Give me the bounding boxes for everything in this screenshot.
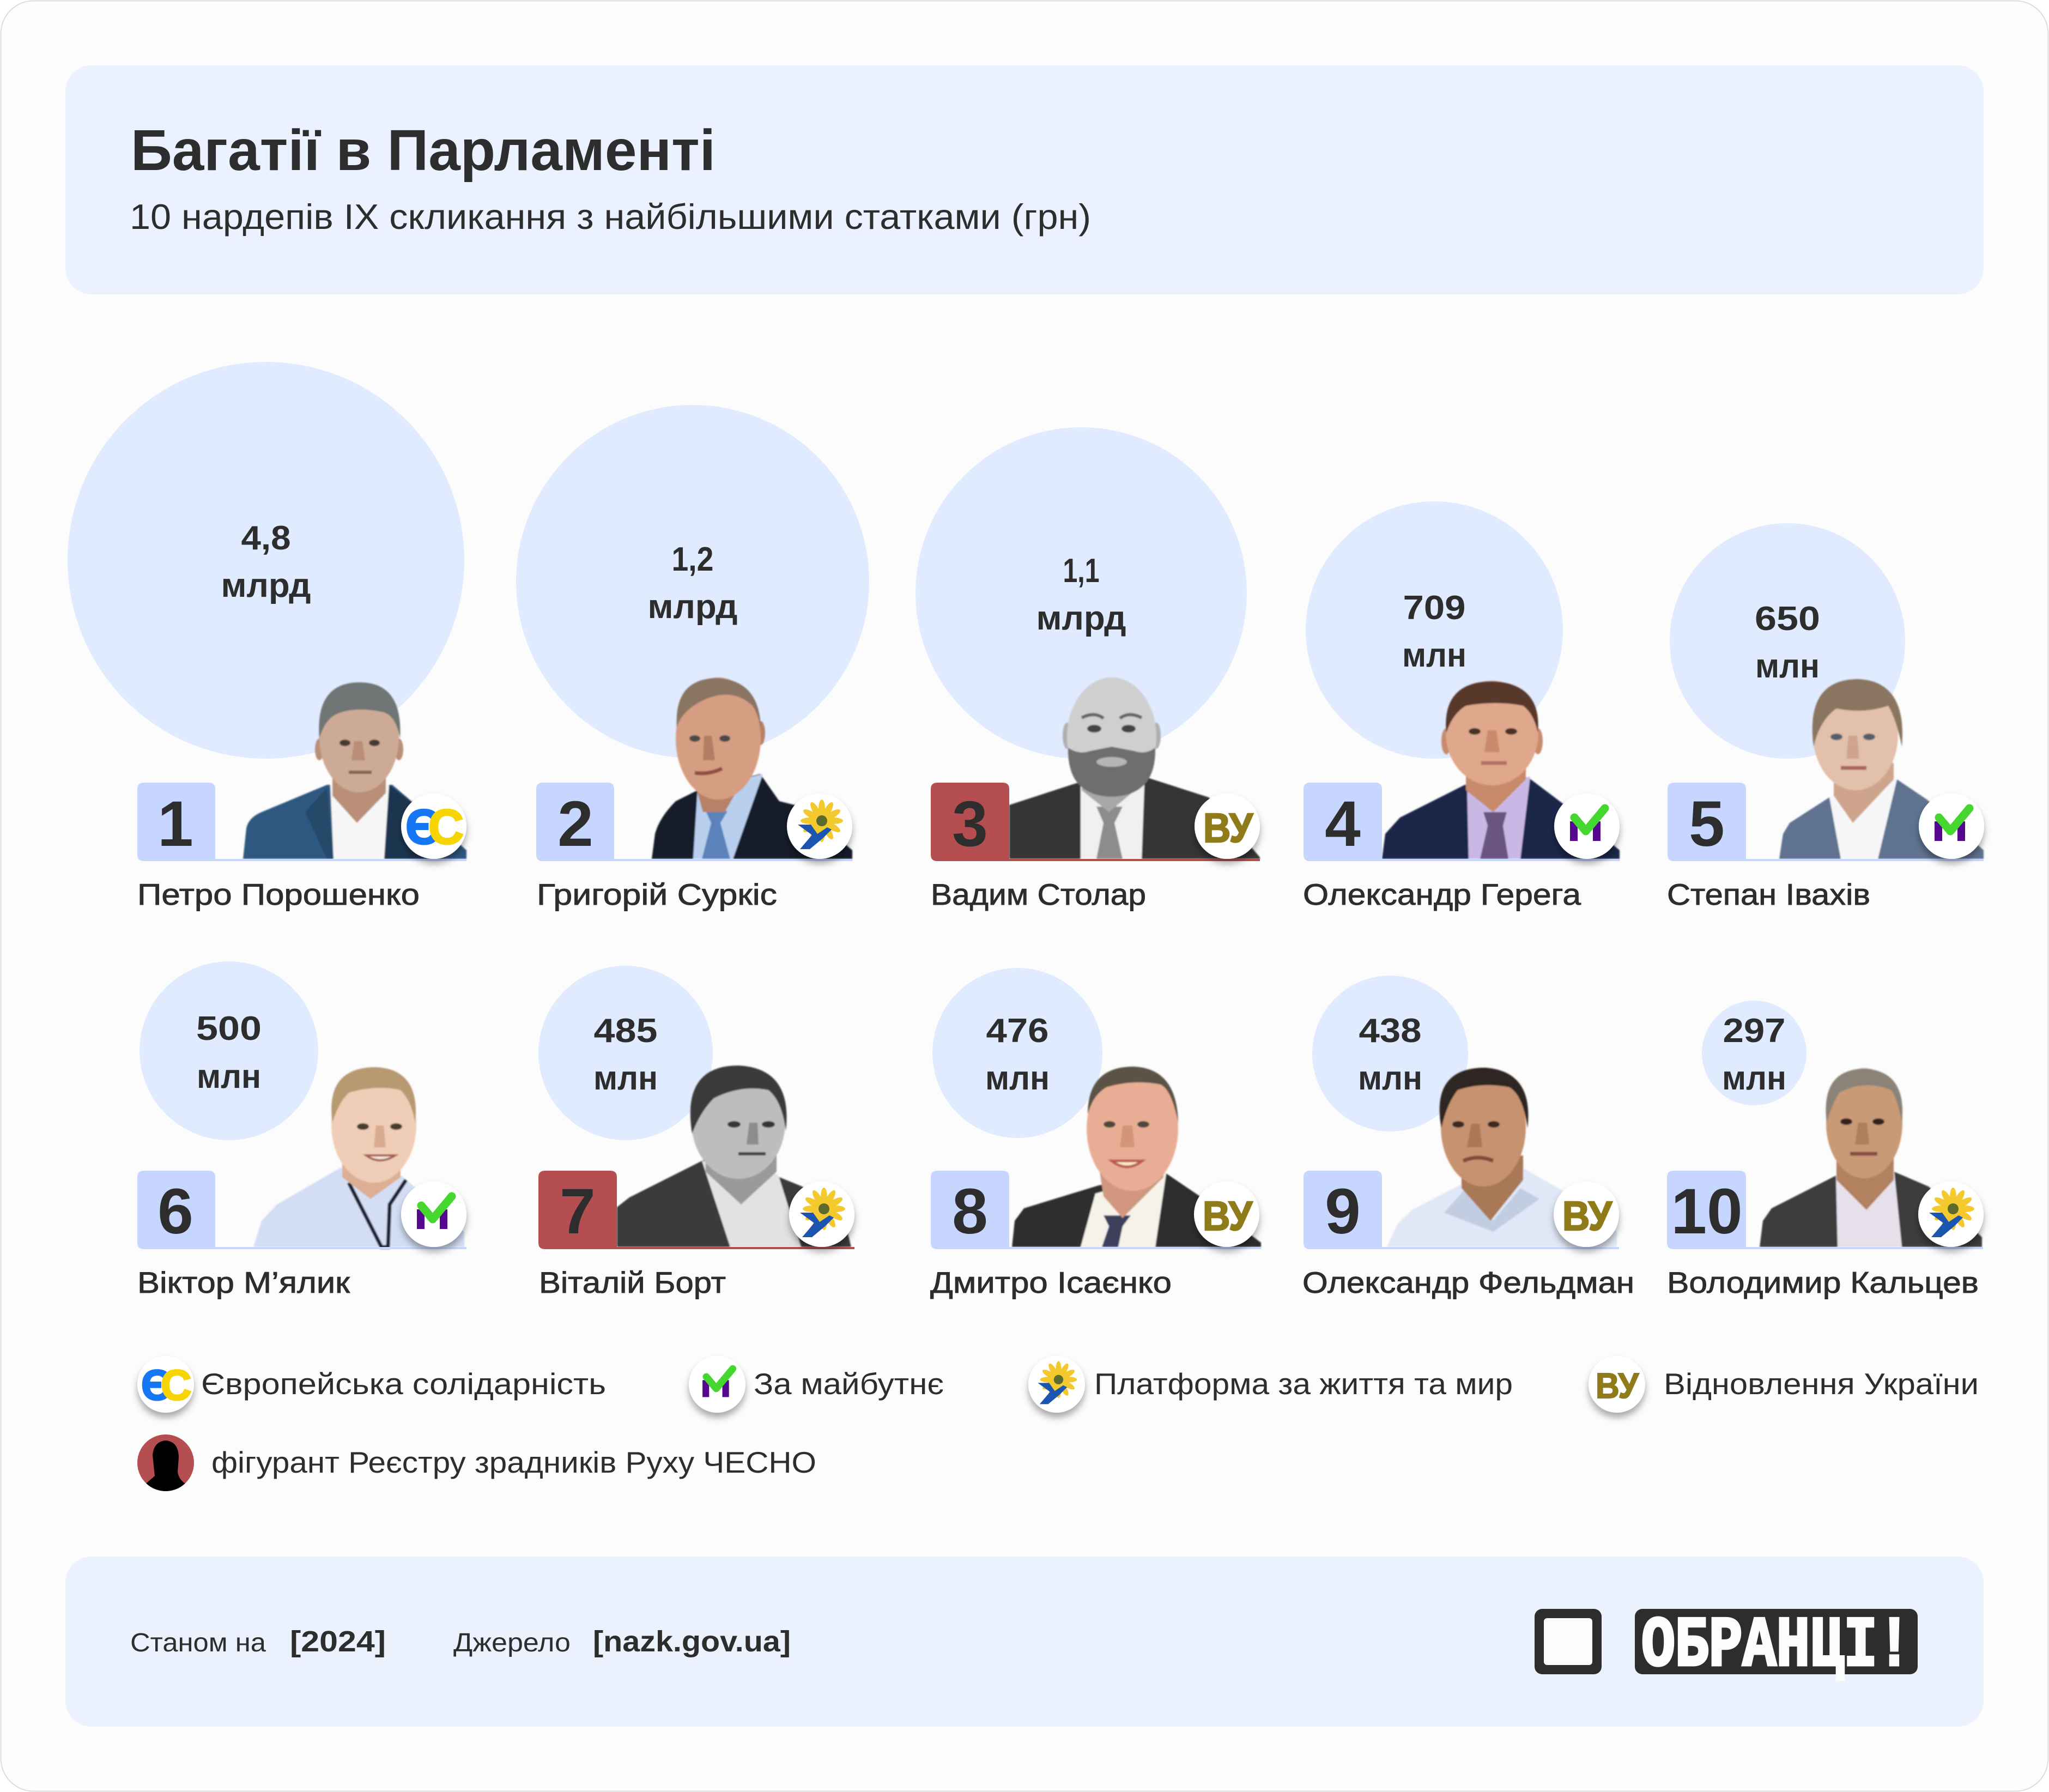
portrait	[617, 1065, 851, 1247]
rank box	[931, 783, 1260, 861]
card: rank 7 Віталій Борт	[538, 966, 854, 1299]
source label: [nazk.gov.ua]	[593, 1625, 791, 1658]
portrait	[1779, 679, 1984, 859]
bubble: 500 млн: млн	[197, 1058, 261, 1095]
bubble: 4,8 млрд	[68, 362, 464, 759]
legend item: Європейська солідарність	[137, 1356, 606, 1413]
bubble: 500 млн	[140, 961, 318, 1140]
bubble: 650 млн	[1670, 523, 1905, 759]
rank box	[1667, 1171, 1983, 1249]
card: rank 6 Віктор М’ялик	[137, 961, 466, 1299]
bubble: 485 млн: 485	[594, 1012, 657, 1050]
portrait	[1760, 1068, 1982, 1247]
legend item: Відновлення України: ВУ	[1596, 1366, 1639, 1406]
bubble: 709 млн	[1306, 501, 1563, 759]
source label	[453, 1625, 791, 1658]
bubble: 485 млн	[538, 966, 713, 1140]
bubble: 650 млн: млн	[1755, 647, 1820, 685]
rank box	[137, 783, 466, 861]
bubble: 438 млн: 438	[1359, 1012, 1421, 1050]
date label	[130, 1625, 386, 1658]
party badge: ВУ: ВУ	[1203, 1193, 1253, 1239]
panel: footer	[65, 1557, 1984, 1727]
party badge: ВУ: ВУ	[1562, 1193, 1612, 1239]
bubble: 1,2 млрд: млрд	[647, 588, 738, 626]
title: Багатії в Парламенті	[131, 118, 716, 183]
rank box	[137, 1171, 466, 1249]
party badge: Платформа за життя та мир	[1918, 1182, 1984, 1247]
party badge: ВУ	[1554, 1182, 1619, 1247]
name: Олександр Герега	[1303, 877, 1581, 911]
portrait	[253, 1067, 464, 1247]
bubble: 438 млн: млн	[1358, 1060, 1422, 1097]
legend	[135, 1356, 1979, 1493]
source label: Джерело	[453, 1628, 571, 1657]
bubble: 476 млн: 476	[986, 1012, 1048, 1050]
logo wordmark: ОБРАНЦІ!	[1641, 1607, 1911, 1687]
panel: header	[65, 65, 1984, 294]
bubble: 1,1 млрд: млрд	[1036, 600, 1126, 637]
bubble: 1,2 млрд	[516, 405, 869, 758]
card: rank 4 Олександр Герега	[1303, 501, 1620, 911]
bubble: 476 млн: млн	[985, 1060, 1050, 1097]
legend item: Європейська солідарність: Є	[141, 1361, 171, 1409]
party badge: ЄС: С	[428, 800, 464, 855]
name: Олександр Фельдман	[1302, 1266, 1634, 1299]
rank box: 2	[557, 788, 593, 860]
name: Володимир Кальцев	[1667, 1266, 1979, 1299]
name: Віктор М’ялик	[137, 1266, 350, 1299]
subtitle: 10 нардепів IX скликання з найбільшими статками (грн)	[130, 197, 1091, 237]
legend item: фігурант Реєстру зрадників Руху ЧЕСНО: фігурант Реєстру зрадників Руху ЧЕСНО	[211, 1445, 816, 1479]
name: Григорій Суркіс	[537, 877, 777, 911]
legend item: Відновлення України	[1589, 1356, 1979, 1413]
legend item: фігурант Реєстру зрадників Руху ЧЕСНО	[135, 1434, 816, 1493]
legend item: За майбутнє: За майбутнє	[754, 1367, 944, 1401]
party badge: ВУ: ВУ	[1203, 805, 1253, 851]
bubble: 476 млн	[932, 968, 1102, 1138]
portrait	[652, 677, 852, 859]
portrait	[1012, 1067, 1261, 1247]
name: Віталій Борт	[539, 1266, 726, 1299]
bubble: 650 млн: 650	[1755, 600, 1820, 638]
bubble: 4,8 млрд: 4,8	[241, 519, 291, 557]
bubble: 1,1 млрд: 1,1	[1063, 552, 1100, 590]
portrait	[1382, 681, 1620, 859]
party badge: За майбутнє	[401, 1182, 466, 1247]
bubble: 297 млн: млн	[1722, 1060, 1786, 1097]
rank box: 8	[952, 1176, 988, 1248]
party badge: Платформа за життя та мир	[789, 1182, 854, 1247]
party badge: За майбутнє	[1554, 794, 1620, 859]
rank box	[1668, 783, 1984, 861]
party badge: ЄС	[401, 794, 466, 859]
bubble: 485 млн: млн	[593, 1060, 658, 1097]
legend item: За майбутнє	[689, 1356, 944, 1413]
rank box: 3	[952, 788, 988, 860]
name: Вадим Столар	[931, 877, 1146, 911]
rank box: 10	[1671, 1176, 1743, 1248]
legend item: Європейська солідарність: Європейська солідарність	[201, 1367, 606, 1401]
bubble: 709 млн: млн	[1402, 637, 1466, 674]
card: rank 1 Петро Порошенко	[68, 362, 466, 911]
card: rank 10 Володимир Кальцев	[1667, 1001, 1984, 1299]
portrait	[243, 682, 466, 859]
card: rank 5 Степан Івахів	[1667, 523, 1984, 911]
legend item: Відновлення України: Відновлення України	[1664, 1367, 1979, 1401]
rank box	[538, 1171, 854, 1249]
bubble: 4,8 млрд: млрд	[221, 567, 311, 604]
date label: [2024]	[290, 1625, 386, 1658]
name: Степан Івахів	[1667, 877, 1870, 911]
legend item: Платформа за життя та мир: Платформа за життя та мир	[1094, 1367, 1513, 1401]
party badge: ЄС: Є	[405, 800, 440, 855]
card: rank 2 Григорій Суркіс	[516, 405, 869, 911]
rank box: 7	[560, 1176, 596, 1248]
bubble: 297 млн	[1702, 1001, 1806, 1105]
legend item: Платформа за життя та мир	[1028, 1356, 1513, 1413]
bubble: 500 млн: 500	[196, 1010, 262, 1048]
legend item: Європейська солідарність: С	[161, 1361, 191, 1409]
bubble: 709 млн: 709	[1403, 589, 1466, 627]
party badge: Платформа за життя та мир	[787, 794, 852, 859]
rank box: 6	[157, 1176, 193, 1248]
logo square	[1535, 1609, 1602, 1674]
rank box	[931, 1171, 1261, 1249]
rank box	[1304, 783, 1620, 861]
party badge: ВУ	[1194, 1182, 1259, 1247]
rank box: 4	[1325, 788, 1361, 860]
date label: Станом на	[130, 1628, 266, 1657]
portrait	[1009, 677, 1260, 859]
card: rank 8 Дмитро Ісаєнко	[930, 968, 1261, 1299]
bubble: 297 млн: 297	[1723, 1012, 1785, 1050]
rank box	[536, 783, 852, 861]
card: rank 9 Олександр Фельдман	[1302, 976, 1634, 1299]
rank box: 5	[1689, 788, 1725, 860]
rank box: 9	[1325, 1176, 1361, 1248]
name: Петро Порошенко	[137, 877, 420, 911]
portrait	[1387, 1068, 1617, 1247]
party badge: ВУ	[1195, 794, 1260, 859]
rank box	[1304, 1171, 1619, 1249]
rank box: 1	[157, 788, 193, 860]
bubble: 438 млн	[1312, 976, 1468, 1131]
party badge: За майбутнє	[1919, 794, 1984, 859]
bubble: 1,2 млрд: 1,2	[671, 541, 714, 578]
card: rank 3 Вадим Столар	[916, 427, 1260, 911]
name: Дмитро Ісаєнко	[930, 1266, 1172, 1299]
bubble: 1,1 млрд	[916, 427, 1247, 759]
